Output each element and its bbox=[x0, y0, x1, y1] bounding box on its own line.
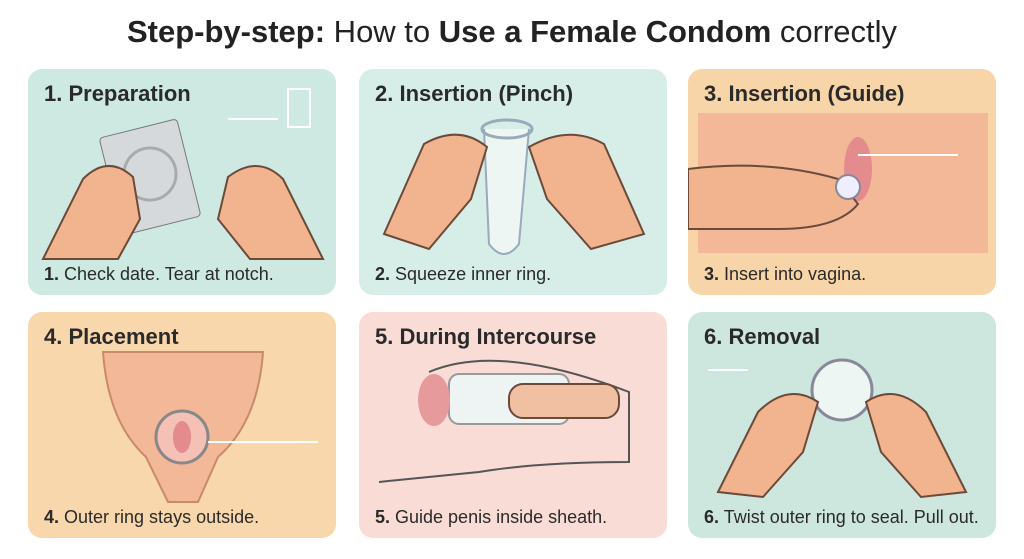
heading: 1. Preparation bbox=[44, 81, 191, 106]
caption: 3. Insert into vagina. bbox=[704, 264, 866, 284]
panel: preparation bbox=[28, 69, 336, 295]
illustration: body with outer ring bbox=[102, 351, 318, 503]
caption: 2. Squeeze inner ring. bbox=[375, 264, 551, 284]
heading: 3. Insertion (Guide) bbox=[704, 81, 904, 106]
illustration: hands pinching condom bbox=[382, 118, 646, 255]
illustration: sheath diagram bbox=[378, 360, 630, 483]
panel: during intercourse bbox=[359, 312, 667, 538]
panel: insertion guide bbox=[688, 69, 996, 295]
title: Step-by-step: How to Use a Female Condom correctly bbox=[127, 14, 897, 49]
panel: removal bbox=[688, 312, 996, 538]
caption: 6. Twist outer ring to seal. Pull out. bbox=[704, 507, 979, 527]
panel: placement bbox=[28, 312, 336, 538]
heading: 5. During Intercourse bbox=[375, 324, 596, 349]
heading: 6. Removal bbox=[704, 324, 820, 349]
illustration: hands holding packet bbox=[41, 88, 325, 260]
panel: insertion pinch bbox=[359, 69, 667, 295]
caption: 5. Guide penis inside sheath. bbox=[375, 507, 607, 527]
illustration: body and hand bbox=[688, 113, 988, 253]
illustration: hands twisting ring bbox=[708, 358, 968, 498]
heading: 2. Insertion (Pinch) bbox=[375, 81, 573, 106]
caption: 4. Outer ring stays outside. bbox=[44, 507, 259, 527]
heading: 4. Placement bbox=[44, 324, 179, 349]
caption: 1. Check date. Tear at notch. bbox=[44, 264, 274, 284]
